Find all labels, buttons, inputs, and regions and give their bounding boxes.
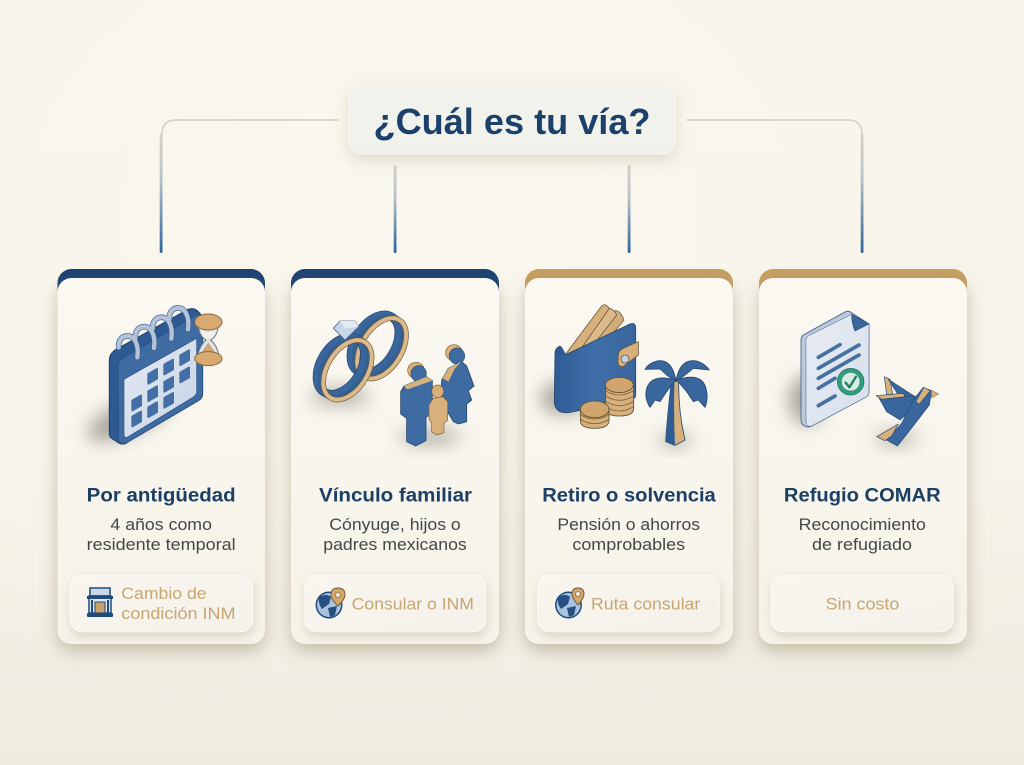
icon: globe with pin xyxy=(556,588,584,618)
heading: Retiro o solvencia xyxy=(542,484,716,506)
badge: ruta consular: Ruta consular xyxy=(591,594,701,614)
badge: cambio de condición INM: Cambio de xyxy=(121,584,207,603)
man xyxy=(401,377,432,446)
coins xyxy=(606,385,634,416)
description: de refugiado xyxy=(812,535,912,554)
description: padres mexicanos xyxy=(323,535,467,554)
badge: sin costo: Sin costo xyxy=(826,594,899,614)
connector lines xyxy=(160,120,863,253)
heading: Refugio COMAR xyxy=(784,484,941,506)
woman xyxy=(441,362,474,424)
right ring xyxy=(340,305,416,387)
badge: consular o INM xyxy=(305,575,486,632)
clasp xyxy=(618,342,638,367)
notes xyxy=(583,311,624,353)
description: 4 años como xyxy=(110,515,212,534)
badge: sin costo xyxy=(771,575,953,632)
icon: rings and family xyxy=(306,305,474,446)
description xyxy=(323,515,467,554)
panel: refugio COMAR xyxy=(759,269,967,644)
title xyxy=(349,85,675,154)
badge: cambio de condición INM: condición INM xyxy=(121,604,236,623)
description: comprobables xyxy=(572,535,685,554)
description: Cónyuge, hijos o xyxy=(329,515,461,534)
left ring xyxy=(306,327,382,408)
dove xyxy=(884,377,893,395)
panel: por antigüedad xyxy=(58,269,265,644)
description: Pensión o ahorros xyxy=(557,515,700,534)
description: Reconocimiento xyxy=(799,515,926,534)
badge: cambio de condición INM xyxy=(70,575,253,632)
panel: vínculo familiar xyxy=(291,269,499,644)
icon: globe with pin xyxy=(316,588,345,618)
description xyxy=(557,515,700,554)
heading: Por antigüedad xyxy=(87,484,236,506)
palm xyxy=(666,377,685,445)
icon: INM building xyxy=(87,588,113,617)
icon: wallet, coins and palm tree xyxy=(540,305,709,447)
title: ¿Cuál es tu vía? xyxy=(374,101,650,142)
badge: consular o INM: Consular o INM xyxy=(352,594,474,614)
badge: ruta consular xyxy=(538,575,719,632)
icon: calendar and hourglass xyxy=(81,308,222,451)
child xyxy=(429,397,448,435)
panel: retiro o solvencia xyxy=(525,269,733,644)
icon: document and dove xyxy=(788,311,939,446)
description: residente temporal xyxy=(87,535,236,554)
heading: Vínculo familiar xyxy=(319,484,472,506)
description xyxy=(799,515,926,554)
wallet xyxy=(554,324,636,413)
description xyxy=(87,515,236,554)
